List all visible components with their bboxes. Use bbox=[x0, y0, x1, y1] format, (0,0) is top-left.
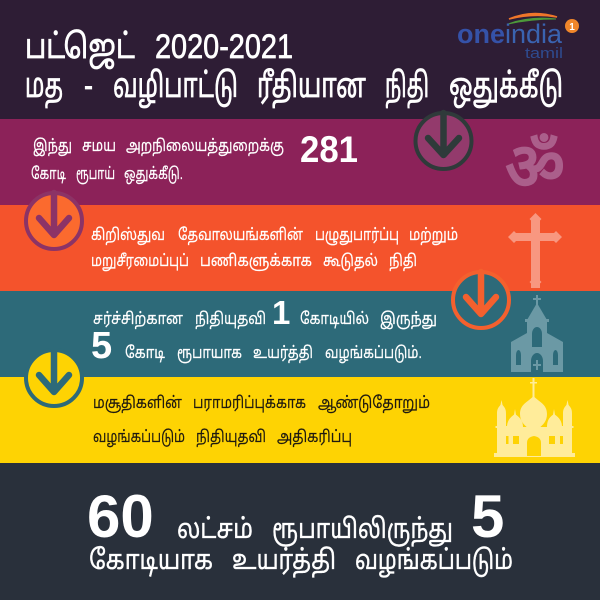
panel: header bbox=[0, 0, 600, 119]
logo: oneindia tamil: 1 bbox=[569, 22, 575, 33]
icon: down arrow yellow panel bbox=[26, 350, 82, 406]
text: footer headline: வழங்கப்படும் bbox=[355, 545, 513, 578]
text: church grant: ரூபாயாக bbox=[177, 345, 242, 364]
text: mosque maintenance: வழங்கப்படும் bbox=[93, 429, 185, 448]
icon: church bbox=[511, 295, 563, 372]
text: footer headline: 5 bbox=[471, 483, 504, 550]
logo: oneindia tamil: india bbox=[505, 19, 563, 49]
text: church repair: மறுசீரமைப்புப் bbox=[91, 252, 189, 272]
text: footer headline: ரூபாயிலிருந்து bbox=[272, 514, 453, 547]
text: mosque maintenance: பராமரிப்புக்காக bbox=[193, 394, 306, 413]
title: ரீதியான bbox=[257, 67, 366, 108]
text: mosque maintenance: அதிகரிப்பு bbox=[277, 429, 352, 447]
text: hindu allocation bbox=[31, 129, 358, 185]
text: hindu allocation: 281 bbox=[300, 129, 358, 170]
text: church grant: கோடியில் bbox=[300, 310, 369, 329]
text: hindu allocation: அறநிலையத்துறைக்கு bbox=[126, 137, 284, 157]
text: church repair: கிறிஸ்துவ bbox=[91, 226, 165, 246]
title: நிதி bbox=[385, 67, 429, 108]
panel: hindu allocation bbox=[0, 119, 600, 205]
text: church repair: கூடுதல் bbox=[323, 252, 378, 272]
text: church repair: மற்றும் bbox=[409, 227, 458, 246]
text: church grant: சர்ச்சிற்கான bbox=[93, 310, 183, 329]
text: church grant: நிதியுதவி bbox=[195, 311, 266, 329]
logo: oneindia tamil: tamil bbox=[525, 45, 563, 62]
text: footer headline: லட்சம் bbox=[177, 514, 253, 544]
text: church grant: இருந்து bbox=[380, 311, 437, 330]
logo: oneindia tamil: one bbox=[457, 19, 505, 49]
title: வழிபாட்டு bbox=[113, 67, 238, 108]
text: mosque maintenance: மசூதிகளின் bbox=[93, 394, 182, 414]
title: பட்ஜெட் bbox=[25, 28, 135, 69]
text: church repair: நிதி bbox=[389, 253, 417, 271]
icon: down arrow orange panel bbox=[26, 193, 82, 249]
text: church repair: பழுதுபார்ப்பு bbox=[315, 227, 399, 246]
text: church repair bbox=[91, 226, 458, 272]
logo: oneindia tamil bbox=[457, 13, 579, 62]
text: church repair: தேவாலயங்களின் bbox=[178, 226, 303, 245]
icon: down arrow teal panel bbox=[453, 272, 509, 328]
icon: om symbol: ॐ bbox=[505, 130, 565, 205]
panel: mosque maintenance bbox=[0, 377, 600, 463]
icon: cross bbox=[508, 213, 562, 288]
title: - bbox=[84, 67, 93, 105]
text: footer headline: 60 bbox=[87, 483, 154, 550]
text: hindu allocation: ரூபாய் bbox=[76, 166, 115, 185]
text: church grant: உயர்த்தி bbox=[253, 344, 313, 363]
text: hindu allocation: கோடி bbox=[31, 165, 66, 184]
text: mosque maintenance: நிதியுதவி bbox=[196, 429, 266, 447]
text: mosque maintenance bbox=[93, 394, 430, 448]
text: mosque maintenance: ஆண்டுதோறும் bbox=[318, 394, 430, 414]
text: church grant bbox=[91, 294, 437, 367]
panel: church repair bbox=[0, 205, 600, 291]
title: மத bbox=[25, 67, 63, 108]
text: footer headline: கோடியாக bbox=[89, 545, 213, 577]
text: footer headline bbox=[87, 483, 513, 578]
icon: mosque bbox=[494, 378, 575, 457]
text: hindu allocation: இந்து bbox=[33, 138, 72, 157]
panel: footer bbox=[0, 463, 600, 600]
text: hindu allocation: சமய bbox=[82, 138, 116, 155]
text: church repair: பணிகளுக்காக bbox=[200, 252, 312, 272]
text: church grant: வழங்கப்படும். bbox=[325, 345, 422, 364]
panel: church grant bbox=[0, 291, 600, 377]
text: footer headline: உயர்த்தி bbox=[232, 545, 336, 578]
title bbox=[25, 28, 563, 108]
title: 2020-2021 bbox=[155, 28, 293, 66]
icon: down arrow purple panel bbox=[416, 113, 472, 169]
text: church grant: 1 bbox=[272, 294, 290, 331]
text: hindu allocation: ஒதுக்கீடு. bbox=[124, 165, 183, 185]
text: church grant: கோடி bbox=[125, 344, 165, 363]
text: church grant: 5 bbox=[91, 325, 112, 367]
